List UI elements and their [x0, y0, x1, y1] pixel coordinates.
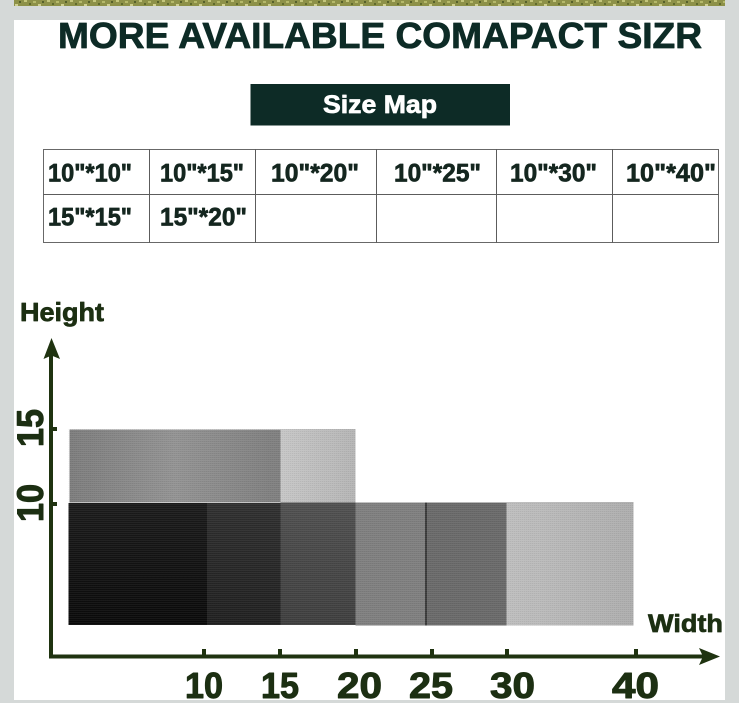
size table: 10"*25" — [394, 160, 481, 188]
photo strip — [14, 0, 725, 6]
horizontal axis numbers — [185, 665, 659, 703]
vertical axis arrow — [44, 338, 60, 658]
size table: 10"*20" — [271, 160, 359, 188]
size table: 10"*30" — [510, 160, 597, 188]
vertical axis numbers: 15 — [10, 409, 51, 447]
horizontal axis arrow — [49, 648, 720, 665]
size swatches — [68, 429, 634, 626]
size table: 10"*40" — [626, 160, 716, 188]
size table: 15"*20" — [160, 204, 247, 232]
size table — [43, 149, 719, 243]
size table: 15"*15" — [48, 204, 132, 232]
vertical axis numbers — [10, 409, 51, 522]
axis label: height: Height — [20, 297, 104, 327]
size map banner — [250, 84, 510, 126]
size table: 10"*10" — [48, 160, 132, 188]
vertical axis numbers: 10 — [10, 484, 51, 522]
size map banner: Size Map — [323, 91, 437, 119]
title: MORE AVAILABLE COMAPACT SIZR — [58, 15, 702, 56]
axis label: width: Width — [648, 610, 723, 638]
size table: 10"*15" — [160, 160, 244, 188]
